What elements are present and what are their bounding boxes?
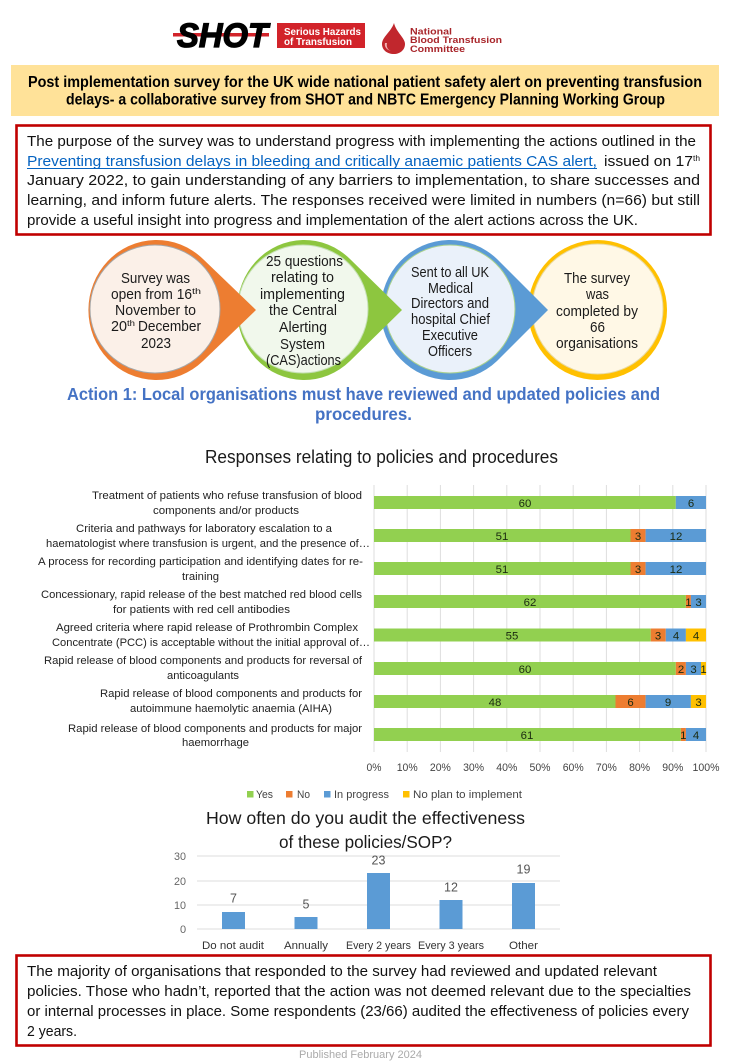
chart title: responses: Responses relating to policies and procedures [205,447,558,467]
value labels: 23 [372,854,385,868]
step 2: 25 questions: the Central [269,303,337,319]
step 3: sent to medical directors: hospital Chief [411,312,491,328]
step 3: sent to medical directors [381,240,548,380]
step 4: completed by 66 organisations: organisations [556,336,638,352]
step 4: completed by 66 organisations: The survey [564,271,631,287]
panel: conclusion: policies. Those who hadn’t, reported that the action was not deemed relevant due to the specialties [27,983,691,1000]
step 2: 25 questions: System [280,337,325,353]
row: concessionary release: for patients with red cell antibodies [113,604,290,616]
panel: conclusion: or internal processes in place. Some respondents (23/66) audited the effectiveness of policies every [27,1003,689,1020]
axis: percent ticks: 80% [629,762,650,774]
axis: percent ticks: 50% [530,762,551,774]
value labels: 5 [303,898,310,912]
step 3: sent to medical directors: Directors and [411,296,489,312]
category labels: Other [509,940,538,952]
logo: National Blood Transfusion Committee [382,23,502,55]
panel: survey purpose: issued on 17 [604,153,693,170]
chart title: audit frequency: of these policies/SOP? [279,832,452,852]
row: concessionary release: 1 [685,597,692,609]
step 1: survey dates: th [192,286,201,296]
step 1: survey dates: December [138,319,201,335]
legend: In progress [334,789,389,801]
row: AIHA: 9 [665,697,671,709]
axis: percent ticks: 90% [662,762,683,774]
bars [222,873,535,929]
step 2: 25 questions: 25 questions [266,254,343,270]
row: anticoagulants: 60 [519,664,531,676]
step 4: completed by 66 organisations: completed by [556,304,639,320]
row: concessionary release: 62 [524,597,536,609]
row: AIHA [100,688,706,715]
panel: survey purpose: Preventing transfusion delays in bleeding and critically anaemic patients CAS alert, [27,153,597,170]
title banner: delays- a collaborative survey from SHOT and NBTC Emergency Planning Working Group [66,92,665,108]
heading: Action 1 [67,384,660,424]
step 1: survey dates: 20 [111,319,127,335]
row: major haemorrhage: 1 [680,730,686,742]
row: recording participation: A process for recording participation and identifying dates for re- [38,556,363,568]
value labels: 7 [230,892,237,906]
row: PCC release: Agreed criteria where rapid release of Prothrombin Complex [56,622,358,634]
stacked bar chart: policies and procedures [38,485,720,774]
row: major haemorrhage: 61 [521,730,533,742]
legend: No plan to implement [413,789,523,801]
row: laboratory escalation: 12 [670,531,682,543]
row: AIHA: 6 [627,697,634,709]
step 2: 25 questions: (CAS)actions [266,353,341,369]
row: laboratory escalation: 3 [635,531,641,543]
row: recording participation: training [182,571,219,583]
y axis labels: 0 [180,924,186,936]
heading: Action 1: Action 1: Local organisations must have reviewed and updated policies and [67,384,660,404]
chart title: audit frequency [206,808,525,852]
row: refuse transfusion: components and/or products [153,505,299,517]
category labels: Every 2 years [346,940,411,952]
step 1: survey dates: November to [115,303,196,319]
logo: National Blood Transfusion Committee: Blood Transfusion [410,35,502,46]
y axis labels: 10 [174,900,186,912]
step 3: sent to medical directors: Executive [422,328,478,344]
step 1: survey dates: 2023 [141,336,171,352]
row: PCC release: 3 [655,630,661,642]
axis: percent ticks: 30% [463,762,484,774]
step 4: completed by 66 organisations [528,240,667,380]
row: anticoagulants: Rapid release of blood components and products for reversal of [44,655,363,667]
logo: SHOT: SHOT [177,17,271,55]
row: PCC release: 55 [506,630,518,642]
bar chart: audit frequency [174,851,560,952]
logo: SHOT [173,17,365,55]
axis: percent ticks: 0% [366,762,382,774]
row: recording participation: 51 [496,564,508,576]
panel: survey purpose: January 2022, to gain understanding of any barriers to implementation, to share successes and [27,172,700,189]
step 2: 25 questions: relating to [271,270,334,286]
logo: National Blood Transfusion Committee: Committee [410,44,465,55]
row: concessionary release: 3 [695,597,702,609]
axis: percent ticks: 70% [596,762,617,774]
row: PCC release: Concentrate (PCC) is acceptable without the initial approval of… [52,637,370,649]
step 2: 25 questions: implementing [260,287,345,303]
step 4: completed by 66 organisations: was [585,287,609,303]
logo: SHOT: Serious Hazards [284,26,361,38]
panel: survey purpose: th [693,153,700,163]
panel: survey purpose: provide a useful insight into progress and implementation of the alert actions across the UK. [27,212,638,229]
row: recording participation: 12 [670,564,682,576]
row: refuse transfusion: 60 [519,498,531,510]
axis: percent ticks: 10% [397,762,418,774]
step 1: survey dates: th [127,318,135,328]
panel: survey purpose: learning, and inform future alerts. The responses received were limited in numbers (n=66) but still [27,192,700,209]
step 1: survey dates: open from 16 [111,287,192,303]
row: AIHA: 48 [489,697,501,709]
step 2: 25 questions [237,240,402,380]
row: major haemorrhage: haemorrhage [182,737,249,749]
axis: percent ticks: 20% [430,762,451,774]
row: anticoagulants: 2 [678,664,684,676]
row: concessionary release [41,589,706,616]
heading: Action 1: procedures. [315,404,412,424]
step 1: survey dates [88,240,256,380]
axis: percent ticks: 100% [692,762,720,774]
panel: conclusion [16,956,710,1046]
y axis labels [174,851,186,936]
row: anticoagulants: anticoagulants [167,670,239,682]
row: major haemorrhage: Rapid release of blood components and products for major [68,723,362,735]
panel: survey purpose: The purpose of the survey was to understand progress with implementing the actions outlined in the [27,133,696,150]
row: laboratory escalation: haematologist where transfusion is urgent, and the presence of… [46,538,370,550]
row: concessionary release: Concessionary, rapid release of the best matched red blood cells [41,589,362,601]
value labels: 19 [517,862,530,876]
panel: survey purpose [16,126,710,234]
footer: publication date: Published February 2024 [299,1049,422,1061]
category labels: Do not audit [202,940,265,952]
chart title: audit frequency: How often do you audit the effectiveness [206,808,525,828]
axis: percent ticks: 40% [496,762,517,774]
row: refuse transfusion [92,490,706,517]
row: major haemorrhage: 4 [693,730,699,742]
y axis labels: 20 [174,876,186,888]
panel: conclusion: The majority of organisations that responded to the survey had reviewed and updated relevant [27,963,658,980]
row: refuse transfusion: 6 [688,498,694,510]
step 3: sent to medical directors: Medical [428,281,473,297]
step 3: sent to medical directors: Sent to all UK [411,265,489,281]
row: anticoagulants [44,655,707,682]
row: AIHA: Rapid release of blood components and products for [100,688,362,700]
row: refuse transfusion: Treatment of patients who refuse transfusion of blood [92,490,362,502]
logo: SHOT: of Transfusion [284,36,352,48]
row: AIHA: 3 [695,697,702,709]
row: laboratory escalation [46,523,706,550]
row: anticoagulants: 3 [690,664,697,676]
title banner [11,65,719,116]
row: recording participation [38,556,706,583]
category labels [202,940,538,952]
category labels: Every 3 years [418,940,484,952]
row: PCC release: 4 [693,630,699,642]
row: recording participation: 3 [635,564,641,576]
y axis labels: 30 [174,851,186,863]
title banner: Post implementation survey for the UK wide national patient safety alert on preventing transfusion [28,74,702,91]
legend: Yes [256,789,273,801]
panel: conclusion: 2 years. [27,1023,77,1040]
step 2: 25 questions: Alerting [279,320,327,336]
axis: percent ticks: 60% [563,762,584,774]
logo: National Blood Transfusion Committee: National [410,26,452,38]
value labels: 12 [444,880,458,894]
row: major haemorrhage [68,723,706,749]
row: PCC release: 4 [673,630,679,642]
value labels [230,854,530,912]
row: laboratory escalation: 51 [496,531,508,543]
axis: percent ticks [366,762,720,774]
step 4: completed by 66 organisations: 66 [590,320,605,336]
row: anticoagulants: 1 [700,664,707,676]
step 1: survey dates: Survey was [121,271,190,287]
category labels: Annually [284,940,328,952]
legend [247,789,523,801]
row: PCC release [52,622,706,649]
step 3: sent to medical directors: Officers [428,344,472,360]
legend: No [297,789,310,801]
row: AIHA: autoimmune haemolytic anaemia (AIHA) [130,703,332,715]
row: laboratory escalation: Criteria and pathways for laboratory escalation to a [76,523,333,535]
